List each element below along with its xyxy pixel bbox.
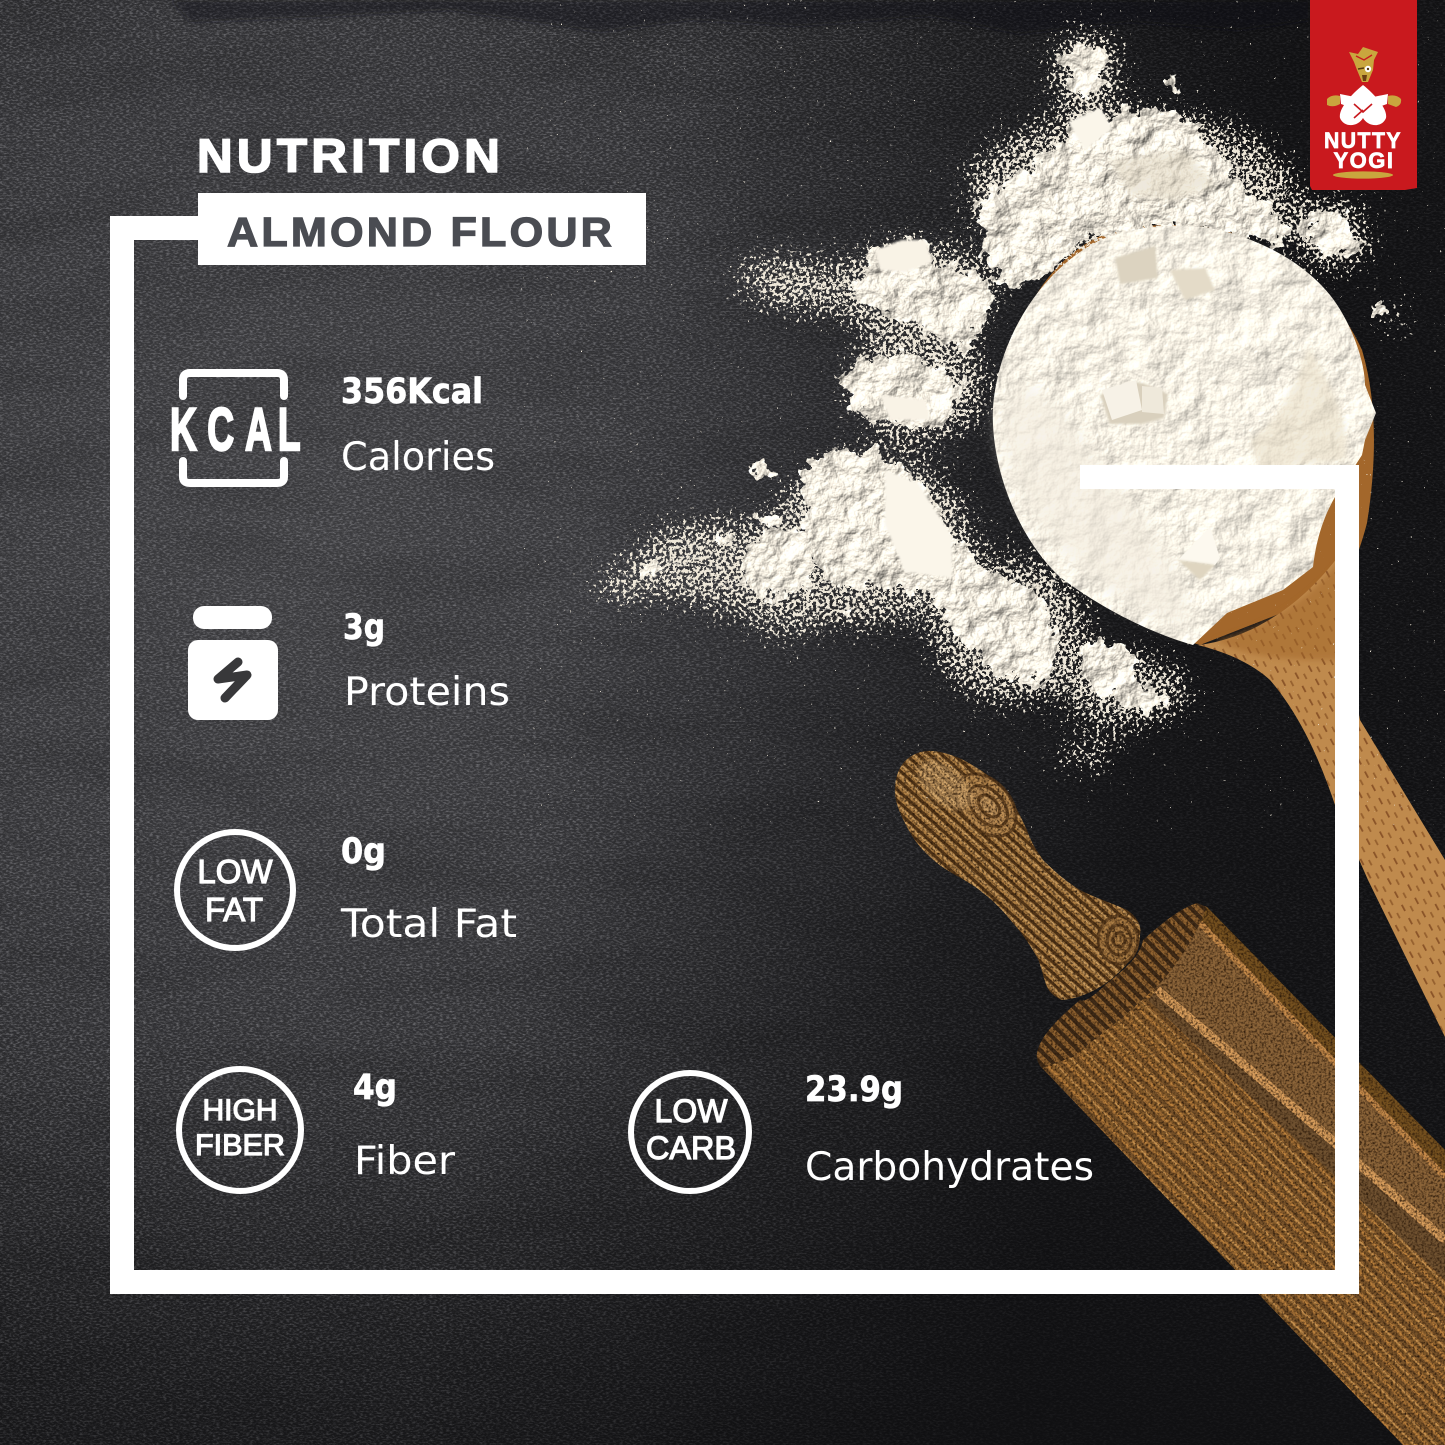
white frame <box>110 216 1359 1294</box>
stat: carbohydrates: Carbohydrates <box>805 1145 1094 1190</box>
stat: proteins <box>343 608 510 715</box>
logo body knot lines <box>1354 104 1372 118</box>
logo yogi knotted body <box>1340 85 1386 125</box>
spoon handle <box>1198 540 1445 1037</box>
logo gold base <box>1333 171 1393 179</box>
heap top cluster <box>1066 46 1105 96</box>
stat: calories <box>341 372 495 480</box>
stat: fiber: Fiber <box>354 1139 456 1184</box>
icon: high fiber: FIBER <box>195 1129 285 1162</box>
icon: low fat: FAT <box>205 891 263 928</box>
heading: almond flour <box>198 193 646 265</box>
heap large lower <box>800 450 1060 690</box>
small lumps <box>751 461 769 479</box>
logo: nutty yogi: YOGI <box>1334 148 1394 173</box>
rolling pin upper face <box>1155 923 1445 1245</box>
icon: protein jar <box>188 606 278 720</box>
logo yogi arms <box>1340 94 1388 108</box>
heading: almond flour: ALMOND FLOUR <box>227 209 615 255</box>
flour heaps <box>639 46 1385 716</box>
heap middle <box>840 352 965 430</box>
flour lumps in spoon <box>1100 382 1168 424</box>
stat: proteins: Proteins <box>344 670 510 715</box>
icon: kcal: KCAL <box>170 396 301 463</box>
stat: total fat: 0g <box>341 832 386 872</box>
heap upper left <box>853 240 993 350</box>
rolling pin handle <box>895 751 1140 1000</box>
stat: calories: 356Kcal <box>341 372 483 412</box>
flour lump details <box>875 108 1215 578</box>
rolling pin lower face <box>1042 988 1445 1445</box>
heap lower right <box>1078 640 1165 716</box>
icon: low fat <box>177 832 293 948</box>
stat: total fat <box>340 832 517 947</box>
logo yogi face details <box>1356 55 1372 81</box>
stat: fiber <box>353 1068 456 1184</box>
rolling pin knob highlight <box>909 751 981 819</box>
icon: kcal <box>170 373 301 483</box>
flour smooth left slope <box>998 386 1190 632</box>
heap left lumps <box>745 525 812 600</box>
heap top <box>975 108 1290 285</box>
icon: low carb <box>631 1073 749 1191</box>
icon: high fiber <box>179 1069 301 1191</box>
rolling pin end grain <box>1037 903 1207 1068</box>
spoon bowl rim <box>1005 225 1374 645</box>
icon: low fat: LOW <box>197 853 273 890</box>
stat: total fat: Total Fat <box>340 902 517 947</box>
rolling pin side band <box>1200 907 1445 1177</box>
icon: low carb: LOW <box>655 1093 728 1129</box>
stat: proteins: 3g <box>343 608 385 648</box>
flour powder scatter <box>590 25 1413 771</box>
logo: nutty yogi <box>1310 0 1417 190</box>
rolling pin ridge highlight <box>1157 990 1445 1240</box>
rolling pin dark band <box>1148 985 1445 1280</box>
spoon neck shading <box>1215 560 1340 660</box>
rolling pin <box>895 751 1445 1445</box>
flour crease shading <box>1250 345 1346 470</box>
stat: carbohydrates: 23.9g <box>805 1070 903 1110</box>
icon: high fiber: HIGH <box>202 1094 278 1127</box>
title: nutrition: NUTRITION <box>197 129 504 182</box>
logo red banner <box>1310 0 1417 190</box>
stat: calories: Calories <box>341 435 495 480</box>
rolling pin knob growth rings <box>944 762 1138 964</box>
stat: carbohydrates <box>805 1070 1094 1190</box>
wooden spoon <box>1005 225 1445 1037</box>
heap right of spoon <box>1298 210 1358 258</box>
stat: fiber: 4g <box>353 1068 397 1108</box>
logo wordmark: NUTTY <box>1324 128 1402 153</box>
flour in spoon <box>993 226 1376 645</box>
logo yogi hands <box>1327 95 1401 107</box>
icon: low carb: CARB <box>646 1130 736 1166</box>
logo yogi head <box>1349 47 1378 82</box>
